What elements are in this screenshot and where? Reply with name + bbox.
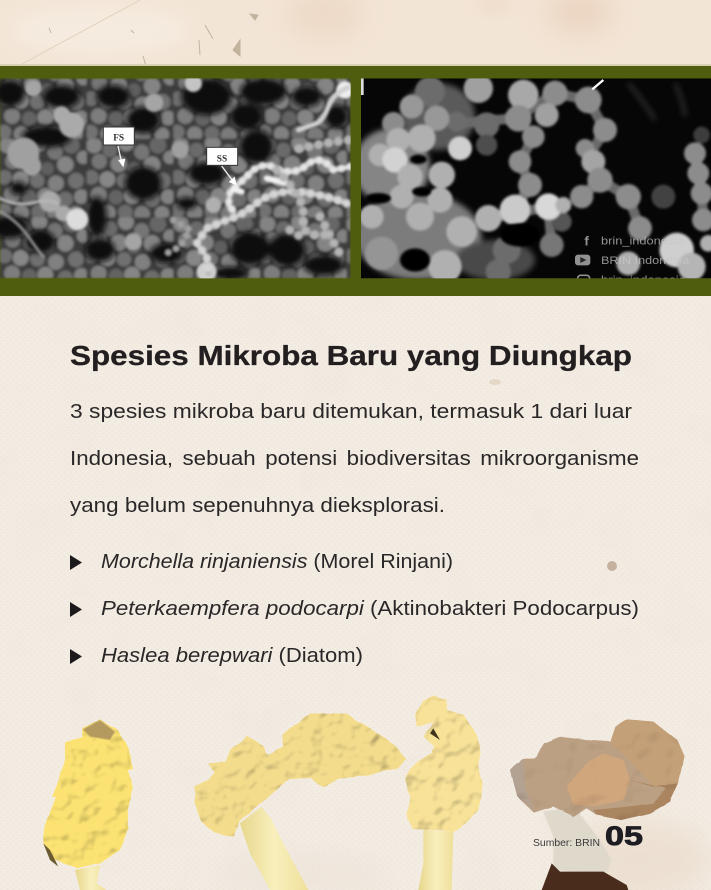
bullet item: Morchella rinjaniensis: Morchella rinjaniensis (Morel Rinjani): [101, 551, 453, 573]
social media watermark: f: [584, 233, 589, 248]
species list: [70, 551, 639, 667]
intro paragraph: yang belum sepenuhnya dieksplorasi.: [70, 494, 445, 517]
photo: microscope image of spores with FS and SS labels: [0, 75, 354, 282]
intro paragraph: [70, 400, 639, 517]
mushroom 2: curved pale morel: [195, 713, 407, 890]
label: FS: [103, 127, 134, 167]
top decorative paper band: [0, 0, 711, 86]
label: SS: [207, 147, 238, 185]
intro paragraph: 3 spesies mikroba baru ditemukan, termasuk 1 dari luar: [70, 400, 632, 423]
green frame band: [0, 66, 711, 296]
source credit: Sumber: BRIN: [533, 837, 600, 849]
photo: close-up microscope image of spore chains: [353, 74, 711, 287]
label: FS: FS: [113, 134, 124, 144]
social media watermark: brin_indonesia: [601, 236, 685, 248]
bullet item: Haslea berepwari: Haslea berepwari (Diatom): [101, 645, 363, 667]
mushroom 1: yellow morel: [43, 719, 133, 890]
page number: 05: [605, 821, 643, 851]
mushroom 4: brown false morel: [510, 719, 684, 890]
social media watermark: BRIN Indonesia: [601, 255, 690, 267]
social media watermark: brin_indonesia: [601, 274, 687, 286]
heading: Spesies Mikroba Baru yang Diungkap: [70, 340, 632, 371]
bullet item: Peterkaempfera podocarpi: Peterkaempfera podocarpi (Aktinobakteri Podocarpus): [101, 598, 639, 620]
mushroom 3: tall pale morel: [405, 696, 483, 890]
morel mushroom photographs: [43, 696, 684, 890]
social media watermark: [574, 236, 689, 278]
intro paragraph: Indonesia, sebuah potensi biodiversitas mikroorganisme: [70, 447, 639, 470]
label: SS: SS: [217, 154, 227, 164]
